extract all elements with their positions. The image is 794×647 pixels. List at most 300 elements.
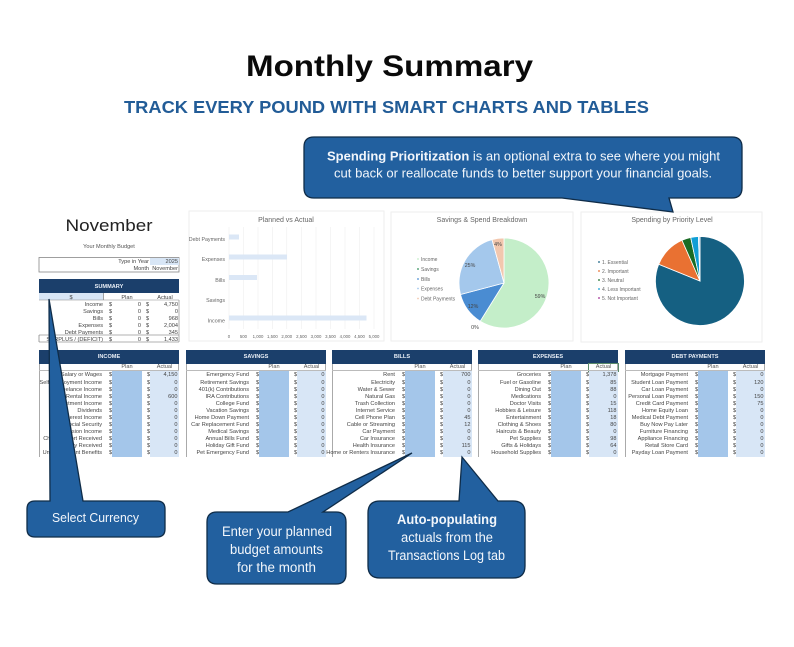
table: savings: Holiday Gift Fund (206, 443, 249, 449)
table: expenses: $ (548, 372, 551, 378)
panel: savings and spend pie chart (391, 212, 573, 341)
summary table: $ (109, 337, 113, 343)
panel: planned vs actual bar chart: 1,000 (253, 334, 264, 339)
table: savings: $ (256, 443, 259, 449)
table: debt payments: Credit Card Payment (636, 401, 688, 407)
table: bills: 0 (467, 401, 470, 407)
table: expenses: EXPENSES (533, 354, 563, 360)
table: income: Social Security (65, 422, 102, 428)
subtitle: TRACK EVERY POUND WITH SMART CHARTS AND TABLES (124, 97, 649, 117)
table: income: $ (109, 380, 112, 386)
panel: planned vs actual bar chart: 1,500 (267, 334, 278, 339)
table: savings: $ (294, 422, 297, 428)
panel: planned vs actual bar chart (189, 211, 384, 341)
year and month selector: November (152, 266, 178, 272)
summary table (39, 279, 179, 343)
table: debt payments: $ (695, 422, 698, 428)
summary table: 0 (138, 337, 141, 343)
table: debt payments: Mortgage Payment (641, 372, 688, 378)
table: savings: $ (256, 387, 259, 393)
summary table: Debt Payments (65, 330, 103, 336)
table: bills: $ (440, 401, 443, 407)
table: debt payments: Furniture Financing (640, 429, 688, 435)
table: bills: 0 (467, 436, 470, 442)
table: income: $ (109, 408, 112, 414)
table: savings: 0 (321, 401, 324, 407)
table: expenses: $ (548, 415, 551, 421)
summary table: SUMMARY (95, 284, 124, 290)
panel: spending by priority pie chart: 4. Less Important (602, 287, 641, 293)
table: savings: $ (256, 436, 259, 442)
table: bills: 0 (467, 380, 470, 386)
table: income: $ (147, 422, 150, 428)
year and month selector: Month (133, 266, 149, 272)
table: bills: Rent (383, 372, 395, 378)
panel: spending by priority pie chart: 3. Neutral (602, 278, 624, 284)
table: income: $ (109, 443, 112, 449)
table: income (39, 350, 179, 457)
table: debt payments: $ (733, 436, 736, 442)
table: bills: $ (402, 394, 405, 400)
summary table: $ (146, 302, 150, 308)
table: debt payments: $ (695, 372, 698, 378)
table: savings: $ (294, 401, 297, 407)
table: debt payments: Appliance Financing (638, 436, 688, 442)
summary table: 0 (175, 309, 178, 315)
table: savings: $ (294, 372, 297, 378)
table: income: 0 (174, 443, 178, 449)
table: savings: $ (256, 450, 259, 456)
table: debt payments: $ (733, 422, 736, 428)
table: savings: Emergency Fund (206, 372, 249, 378)
table: expenses: 0 (613, 429, 616, 435)
table: debt payments: $ (733, 387, 736, 393)
table: bills: 0 (467, 450, 470, 456)
table: debt payments: 75 (757, 401, 764, 407)
table: savings: Medical Savings (208, 429, 249, 435)
table: income: 600 (168, 394, 178, 400)
table: expenses: 88 (610, 387, 616, 393)
table: bills: $ (440, 436, 443, 442)
table: savings: Pet Emergency Fund (196, 450, 249, 456)
table: expenses: Entertainment (506, 415, 541, 421)
table: expenses: 1,378 (602, 372, 616, 378)
table: bills: $ (402, 450, 405, 456)
table: bills: $ (402, 422, 405, 428)
table: income: Actual (157, 364, 172, 370)
panel: planned vs actual bar chart: 2,000 (281, 334, 293, 339)
table: bills: 0 (467, 387, 470, 393)
table: debt payments: Car Loan Payment (641, 387, 688, 393)
table: bills: 0 (467, 429, 470, 435)
callout: select currency (27, 299, 165, 537)
callout: spending prioritization: cut back or reallocate funds to better support your financial goals. (334, 166, 712, 180)
table: expenses: $ (586, 380, 589, 386)
summary table: $ (109, 316, 113, 322)
table: income: 0 (174, 450, 178, 456)
table: debt payments: Medical Debt Payment (632, 415, 688, 421)
table: expenses: 0 (613, 394, 616, 400)
year and month selector: 2025 (166, 259, 178, 265)
panel: planned vs actual bar chart: 0 (228, 334, 231, 339)
table: debt payments: $ (733, 450, 736, 456)
table: income: 0 (174, 408, 178, 414)
table: income: INCOME (98, 354, 120, 360)
table: expenses: 98 (610, 436, 616, 442)
table: debt payments: $ (695, 415, 698, 421)
table: expenses: Fuel or Gasoline (500, 380, 541, 386)
table: expenses: Actual (596, 364, 611, 370)
table: savings: $ (256, 408, 259, 414)
table: expenses: $ (586, 408, 589, 414)
table: savings: 0 (321, 408, 324, 414)
table: debt payments: $ (695, 443, 698, 449)
summary table: $ (146, 316, 150, 322)
table: expenses: $ (548, 436, 551, 442)
table: bills: Cell Phone Plan (355, 415, 395, 421)
table: bills: Plan (414, 364, 426, 370)
panel: savings and spend pie chart: Savings (421, 267, 439, 273)
callout: enter planned budget: for the month (237, 560, 316, 575)
panel: planned vs actual bar chart: Savings (206, 298, 225, 304)
table: bills: $ (440, 429, 443, 435)
table: expenses: Hobbies & Leisure (495, 408, 541, 414)
table: income: $ (147, 415, 150, 421)
table: bills: Car Payment (362, 429, 395, 435)
table: debt payments: 0 (760, 372, 764, 378)
table: income: $ (147, 443, 150, 449)
table: income: $ (147, 372, 150, 378)
table: expenses: $ (548, 429, 551, 435)
table: debt payments: $ (733, 380, 736, 386)
table: expenses: 18 (610, 415, 616, 421)
table: savings: $ (294, 380, 297, 386)
panel: planned vs actual bar chart: 2,500 (296, 334, 307, 339)
summary table: Income (85, 302, 103, 308)
summary table: 4,750 (164, 302, 178, 308)
table: income: $ (109, 394, 112, 400)
table: income: Self-Employment Income (40, 380, 102, 386)
table: income: Salary or Wages (61, 372, 102, 378)
table: expenses: 64 (610, 443, 616, 449)
table: debt payments: 0 (760, 387, 764, 393)
table: bills: $ (440, 380, 443, 386)
panel: spending by priority pie chart (581, 212, 762, 342)
table: income: $ (109, 429, 112, 435)
table: savings: 0 (321, 422, 324, 428)
summary table: 345 (169, 330, 178, 336)
table: bills: $ (402, 387, 405, 393)
summary table: $ (109, 323, 113, 329)
table: debt payments: 0 (760, 436, 764, 442)
panel: savings and spend pie chart: Expenses (421, 286, 443, 292)
table: income: $ (147, 436, 150, 442)
table: bills: Electricity (371, 380, 395, 386)
table: income: 0 (174, 380, 178, 386)
table: savings: 0 (321, 436, 324, 442)
panel: planned vs actual bar chart: Income (208, 318, 225, 324)
table: income: 0 (174, 429, 178, 435)
summary table: $ (69, 295, 73, 301)
table: savings: 0 (321, 415, 324, 421)
table: bills: 700 (461, 372, 470, 378)
panel: planned vs actual bar chart: 4,000 (340, 334, 351, 339)
table: income: 0 (174, 387, 178, 393)
budget subtitle: Your Monthly Budget (83, 244, 135, 250)
table: income: $ (147, 450, 150, 456)
table: savings: $ (256, 380, 259, 386)
table: savings: 401(k) Contributions (199, 387, 249, 393)
table: debt payments: $ (733, 429, 736, 435)
table: expenses: $ (586, 443, 589, 449)
panel: savings and spend pie chart: Savings & Spend Breakdown (437, 217, 527, 224)
table: bills: $ (440, 408, 443, 414)
panel: planned vs actual bar chart: Expenses (202, 257, 225, 263)
table: debt payments: Retail Store Card (645, 443, 688, 449)
table: savings: $ (256, 394, 259, 400)
summary table: Plan (121, 295, 133, 301)
table: debt payments: $ (733, 372, 736, 378)
table: debt payments: Actual (743, 364, 758, 370)
table: debt payments: $ (695, 394, 698, 400)
table: bills: $ (402, 408, 405, 414)
table: expenses: 118 (608, 408, 616, 414)
panel: savings and spend pie chart: 4% (494, 242, 502, 248)
summary table: $ (109, 330, 113, 336)
summary table: Actual (157, 295, 173, 301)
table: bills: Cable or Streaming (347, 422, 395, 428)
table: debt payments: 150 (754, 394, 764, 400)
panel: planned vs actual bar chart: Planned vs Actual (258, 217, 314, 224)
table: debt payments: $ (695, 387, 698, 393)
table: income: $ (109, 401, 112, 407)
table: savings: 0 (321, 394, 324, 400)
table: bills: $ (440, 387, 443, 393)
table: income: $ (147, 401, 150, 407)
table: income: 0 (174, 436, 178, 442)
summary table: 0 (138, 316, 141, 322)
table: expenses: $ (548, 394, 551, 400)
table: bills: Home or Renters Insurance (326, 450, 395, 456)
table: bills: $ (402, 401, 405, 407)
table: expenses: $ (548, 380, 551, 386)
table: expenses: Plan (560, 364, 572, 370)
table: debt payments (625, 350, 765, 457)
table: expenses: $ (586, 436, 589, 442)
table: savings: Actual (304, 364, 319, 370)
panel: planned vs actual bar chart: 4,500 (354, 334, 365, 339)
table: income: 0 (174, 415, 178, 421)
table: income: 0 (174, 401, 178, 407)
table: bills: Natural Gas (365, 394, 395, 400)
table: debt payments: 0 (760, 422, 764, 428)
table: savings: $ (294, 415, 297, 421)
summary table: 0 (138, 330, 141, 336)
table: savings: Plan (268, 364, 280, 370)
table: income: $ (109, 450, 112, 456)
table: bills: 0 (467, 394, 470, 400)
panel: spending by priority pie chart: 2. Important (602, 269, 629, 275)
table: debt payments: Personal Loan Payment (628, 394, 688, 400)
table: income: $ (147, 408, 150, 414)
table: savings: $ (294, 450, 297, 456)
table: savings: $ (256, 372, 259, 378)
summary table: 1,433 (164, 337, 178, 343)
callout: auto-populating actuals: Auto-populating (397, 512, 497, 527)
table: bills: $ (440, 450, 443, 456)
summary table: 968 (169, 316, 178, 322)
table: income: Interest Income (63, 415, 102, 421)
panel: planned vs actual bar chart: Bills (215, 278, 225, 284)
table: expenses: Medications (511, 394, 541, 400)
table: income: $ (109, 415, 112, 421)
table: debt payments: $ (733, 401, 736, 407)
table: expenses: 0 (613, 450, 616, 456)
table: bills: $ (402, 380, 405, 386)
table: expenses: $ (548, 408, 551, 414)
table: savings: IRA Contributions (205, 394, 249, 400)
table: income: Investment Income (55, 401, 102, 407)
summary table: Savings (83, 309, 103, 315)
table: expenses: Household Supplies (491, 450, 541, 456)
table: expenses: Doctor Visits (510, 401, 541, 407)
table: income: Freelance Income (57, 387, 102, 393)
summary table: 0 (138, 323, 141, 329)
table: savings: College Fund (216, 401, 249, 407)
table: bills: $ (402, 436, 405, 442)
callout: enter planned budget: budget amounts (230, 542, 323, 557)
table: bills: $ (402, 415, 405, 421)
panel: savings and spend pie chart: 12% (468, 304, 479, 310)
table: debt payments: 0 (760, 408, 764, 414)
table: bills: 12 (464, 422, 470, 428)
table: income: Rental Income (66, 394, 102, 400)
table: income: $ (147, 387, 150, 393)
table: debt payments: 120 (754, 380, 764, 386)
table: bills: Actual (450, 364, 465, 370)
summary table: $ (146, 337, 150, 343)
panel: planned vs actual bar chart: 3,000 (311, 334, 322, 339)
table: savings: 0 (321, 372, 324, 378)
summary table: $ (146, 323, 150, 329)
table: expenses: $ (586, 422, 589, 428)
table: savings: $ (294, 387, 297, 393)
table: savings: $ (256, 429, 259, 435)
callout: enter planned budget: Enter your planned (222, 524, 332, 539)
table: debt payments: $ (733, 408, 736, 414)
table: expenses: Gifts & Holidays (501, 443, 541, 449)
table: debt payments: $ (695, 408, 698, 414)
table: bills: $ (402, 443, 405, 449)
callout: select currency: Select Currency (52, 510, 139, 525)
table: debt payments: $ (695, 401, 698, 407)
table: income: 4,150 (164, 372, 178, 378)
table: debt payments: 0 (760, 450, 764, 456)
table: bills: $ (440, 372, 443, 378)
panel: savings and spend pie chart: Bills (421, 277, 431, 283)
table: savings: $ (256, 422, 259, 428)
summary table: $ (109, 302, 113, 308)
summary table: $ (146, 309, 150, 315)
table: income: $ (147, 429, 150, 435)
month heading: November (66, 216, 153, 235)
table: expenses: Haircuts & Beauty (496, 429, 541, 435)
table: bills: $ (440, 415, 443, 421)
table: bills: Car Insurance (360, 436, 395, 442)
table: income: Child Support Received (43, 436, 102, 442)
table: savings: 0 (321, 450, 324, 456)
panel: spending by priority pie chart: Spending by Priority Level (631, 217, 713, 224)
table: income: $ (109, 436, 112, 442)
callout: enter planned budget (207, 453, 412, 584)
table: bills: 0 (467, 408, 470, 414)
table: debt payments: $ (733, 394, 736, 400)
summary table: Expenses (78, 323, 103, 329)
callout: auto-populating actuals (368, 457, 525, 578)
table: expenses: 15 (610, 401, 616, 407)
table: debt payments: Buy Now Pay Later (640, 422, 688, 428)
table: savings: 0 (321, 443, 324, 449)
table: expenses: Pet Supplies (510, 436, 541, 442)
table: debt payments: $ (695, 429, 698, 435)
summary table: $ (146, 330, 150, 336)
table: savings: 0 (321, 380, 324, 386)
table: expenses: 80 (610, 422, 616, 428)
table: debt payments: Payday Loan Payment (632, 450, 688, 456)
table: expenses (478, 350, 618, 457)
table: income: $ (109, 387, 112, 393)
table: expenses: $ (548, 401, 551, 407)
panel: savings and spend pie chart: Income (421, 257, 438, 263)
summary table: Bills (93, 316, 103, 322)
table: debt payments: $ (695, 450, 698, 456)
panel: spending by priority pie chart: 5. Not Important (602, 296, 638, 302)
panel: planned vs actual bar chart: 3,500 (325, 334, 336, 339)
table: income: Plan (121, 364, 133, 370)
table: expenses: Clothing & Shoes (498, 422, 541, 428)
table: debt payments: $ (695, 380, 698, 386)
table: expenses: 85 (610, 380, 616, 386)
callout: auto-populating actuals: actuals from the (401, 530, 493, 545)
table: bills (332, 350, 472, 457)
table: savings: SAVINGS (244, 354, 268, 360)
table: debt payments: 0 (760, 429, 764, 435)
summary table: $ (109, 309, 113, 315)
table: bills: $ (440, 394, 443, 400)
panel: planned vs actual bar chart: 5,000 (369, 334, 380, 339)
table: savings: Annual Bills Fund (205, 436, 249, 442)
table: debt payments: Home Equity Loan (642, 408, 688, 414)
table: income: Dividends (77, 408, 102, 414)
panel: planned vs actual bar chart: Debt Payments (189, 237, 225, 243)
summary table: 0 (138, 309, 141, 315)
table: income: Pension Income (62, 429, 102, 435)
table: debt payments: DEBT PAYMENTS (672, 354, 718, 360)
table: bills: Water & Sewer (358, 387, 395, 393)
table: expenses: $ (548, 443, 551, 449)
title: Monthly Summary (246, 50, 533, 83)
table: bills: Trash Collection (355, 401, 395, 407)
table: bills: $ (402, 429, 405, 435)
table: expenses: $ (586, 429, 589, 435)
table: savings: $ (256, 401, 259, 407)
panel: savings and spend pie chart: 59% (535, 294, 546, 300)
callout: auto-populating actuals: Transactions Log tab (388, 548, 505, 563)
table: debt payments: 0 (760, 443, 764, 449)
table: income: $ (147, 394, 150, 400)
table: savings: 0 (321, 387, 324, 393)
table: debt payments: $ (733, 415, 736, 421)
